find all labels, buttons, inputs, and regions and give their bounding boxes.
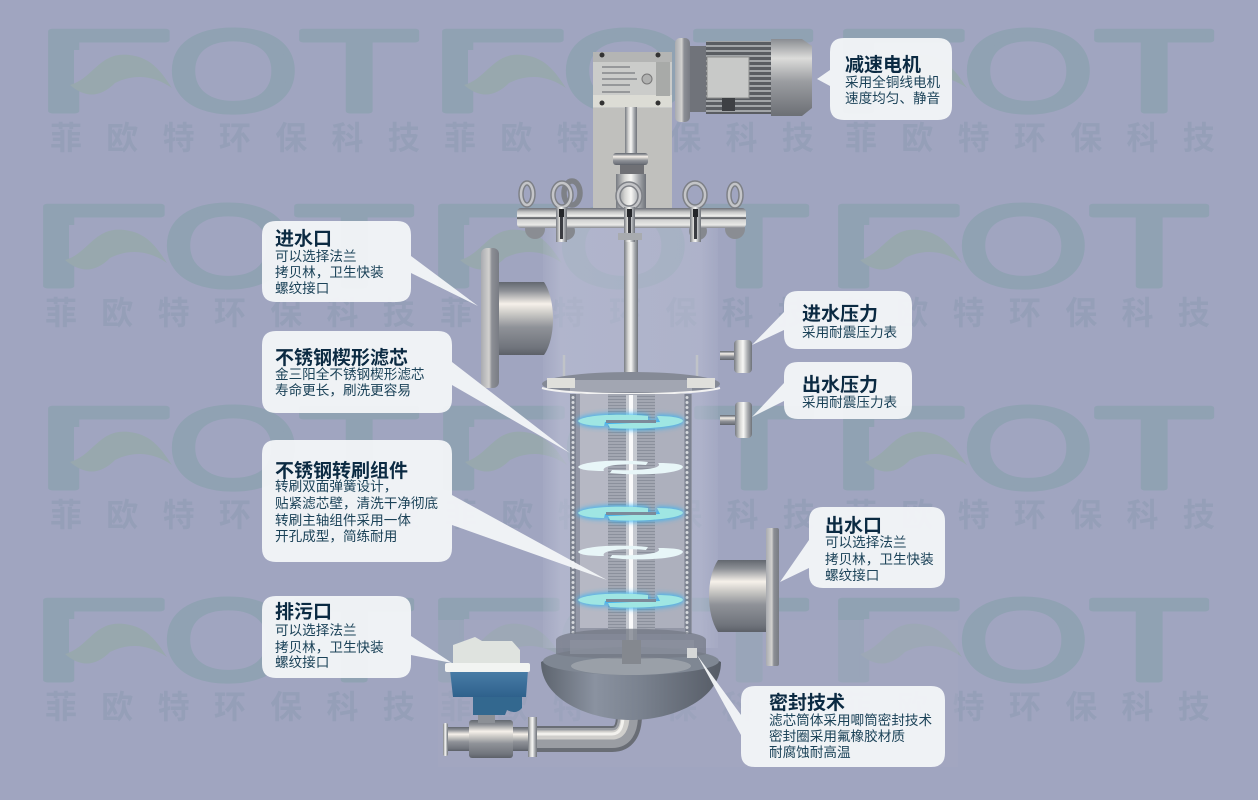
callout: 进水口: 可以选择法兰 xyxy=(275,249,357,264)
lower machine backdrop xyxy=(438,620,958,767)
watermark logo row 2 left: F xyxy=(29,182,169,311)
callout: 不锈钢楔形滤芯: 金三阳全不锈钢楔形滤芯 xyxy=(275,366,425,382)
watermark logo row 3 right: 菲欧特环保科技 xyxy=(845,497,1239,533)
watermark logo row 4 centre xyxy=(424,575,834,725)
callout: 出水口: 可以选择法兰 xyxy=(825,535,907,550)
watermark logo row 4 left: O xyxy=(162,575,294,705)
watermark logo row 4 right: F xyxy=(824,576,964,705)
callout: 出水口 xyxy=(780,507,945,588)
watermark logo row 2 centre: O xyxy=(558,181,689,311)
brush ring 4 xyxy=(578,546,683,559)
callout: 排污口: 排污口 xyxy=(275,601,332,623)
callout: 不锈钢转刷组件: 转刷双面弹簧设计， xyxy=(275,479,397,494)
icon: gearbox xyxy=(593,52,672,108)
watermark logo row 4 left xyxy=(29,575,439,725)
watermark logo row 4 centre: F xyxy=(424,576,564,705)
watermark logo row 2 centre: F xyxy=(424,182,564,311)
filter machine xyxy=(443,38,812,758)
callout: 密封技术: 耐腐蚀耐高温 xyxy=(769,744,851,760)
watermark logo row 1 centre xyxy=(428,6,838,156)
callout: 密封技术: 密封圈采用氟橡胶材质 xyxy=(769,728,905,744)
watermark logo row 1 left: T xyxy=(299,7,419,136)
watermark logo row 4 right: O xyxy=(958,575,1089,705)
callout: 进水口: 进水口 xyxy=(275,228,332,250)
icon: drain pipe xyxy=(530,715,629,739)
callout: 不锈钢楔形滤芯: 不锈钢楔形滤芯 xyxy=(275,347,408,369)
callout: 进水压力: 进水压力 xyxy=(802,303,878,325)
callout: 出水口: 拷贝林，卫生快装 xyxy=(825,552,934,567)
brush ring 1 xyxy=(578,415,683,429)
callout: 密封技术: 密封技术 xyxy=(769,691,845,714)
watermark logo row 2 right: 菲欧特环保科技 xyxy=(840,295,1234,331)
watermark logo row 3 left: F xyxy=(34,384,174,513)
watermark logo row 3 centre xyxy=(429,383,839,533)
watermark logo row 2 left: 菲欧特环保科技 xyxy=(45,295,439,331)
watermark logo row 4 left: F xyxy=(29,576,169,705)
icon: top clamp plate xyxy=(517,207,746,242)
watermark logo row 2 right: T xyxy=(1089,182,1209,311)
icon: support bracket xyxy=(593,105,672,211)
watermark logo row 3 right: F xyxy=(829,384,969,513)
watermark logo row 2 left xyxy=(29,181,439,331)
callout: 进水压力: 采用耐震压力表 xyxy=(802,325,898,340)
watermark logo row 3 right: O xyxy=(962,383,1094,513)
watermark logo row 1 right: 菲欧特环保科技 xyxy=(845,120,1239,156)
shaft highlight xyxy=(629,395,633,640)
callout: 排污口: 可以选择法兰 xyxy=(275,623,357,638)
callout: 出水口: 出水口 xyxy=(825,515,882,537)
callout: 进水压力 xyxy=(752,291,912,349)
watermark logo row 2 right: F xyxy=(824,182,964,311)
callout: 出水压力 xyxy=(752,362,912,419)
icon: inner flange xyxy=(542,355,720,396)
watermark logo row 3 left xyxy=(34,383,444,533)
watermark logo row 3 centre: 菲欧特环保科技 xyxy=(445,497,839,533)
watermark logo row 1 centre: F xyxy=(428,7,568,136)
callout: 密封技术 xyxy=(697,655,945,767)
callout: 排污口: 拷贝林，卫生快装 xyxy=(275,640,384,655)
callout: 不锈钢转刷组件: 不锈钢转刷组件 xyxy=(275,460,408,482)
watermark logo row 4 right xyxy=(824,575,1234,725)
main shaft xyxy=(624,238,638,398)
watermark logo row 1 centre: O xyxy=(562,6,693,136)
brush ring 2 xyxy=(578,461,683,474)
watermark logo row 1 right xyxy=(829,6,1239,156)
callout: 排污口 xyxy=(262,596,452,678)
watermark logo row 4 right: 菲欧特环保科技 xyxy=(840,689,1234,725)
icon: eye bolts xyxy=(521,181,741,208)
icon: outlet pipe xyxy=(709,528,779,666)
icon: fan cover xyxy=(771,39,812,116)
callout: 密封技术: 滤芯筒体采用唧筒密封技术 xyxy=(769,712,933,728)
callout: 排污口: 螺纹接口 xyxy=(275,654,329,670)
watermark logo row 3 left: T xyxy=(299,384,419,513)
icon: seal collar xyxy=(556,629,706,664)
watermark logo row 4 left: T xyxy=(294,576,414,705)
watermark logo row 2 right: O xyxy=(958,181,1089,311)
callout: 不锈钢转刷组件: 开孔成型，简练耐用 xyxy=(275,528,397,544)
callout: 减速电机: 速度均匀、静音 xyxy=(845,90,940,106)
outer transparent tank xyxy=(543,228,718,648)
icon: drain valve xyxy=(443,637,537,758)
icon: inlet pressure gauge xyxy=(720,340,752,373)
watermark logo row 1 right: F xyxy=(829,7,969,136)
callout: 不锈钢楔形滤芯 xyxy=(262,331,570,453)
watermark logo row 3 centre: F xyxy=(429,384,569,513)
callout: 不锈钢转刷组件: 转刷主轴组件采用一体 xyxy=(275,513,411,528)
brush ring 3 xyxy=(578,507,683,521)
drive shaft upper xyxy=(625,107,637,157)
watermark logo row 1 centre: T xyxy=(693,7,813,136)
watermark logo row 1 left: F xyxy=(34,7,174,136)
watermark logo row 4 right: T xyxy=(1089,576,1209,705)
icon: motor flange xyxy=(675,38,690,122)
icon: glass cylinder xyxy=(570,394,692,634)
callout: 减速电机 xyxy=(817,38,952,120)
icon: bottom dish xyxy=(541,647,721,720)
watermark logo row 4 centre: 菲欧特环保科技 xyxy=(440,689,834,725)
watermark logo row 3 centre: O xyxy=(562,383,694,513)
callout: 不锈钢转刷组件: 贴紧滤芯壁，清洗干净彻底 xyxy=(275,496,439,511)
watermark logo row 2 left: O xyxy=(162,181,294,311)
watermark logo row 3 right: T xyxy=(1094,384,1214,513)
watermark logo row 2 centre xyxy=(424,181,834,331)
callout: 进水口 xyxy=(262,221,478,306)
callout: 不锈钢转刷组件 xyxy=(262,440,607,580)
callout: 出水压力: 采用耐震压力表 xyxy=(802,395,898,410)
watermark logo row 2 centre: T xyxy=(689,182,809,311)
watermark logo row 1 left xyxy=(34,6,444,156)
icon: nut and collar xyxy=(613,153,648,210)
callout: 进水口: 拷贝林，卫生快装 xyxy=(275,265,384,280)
icon: outlet pressure gauge xyxy=(720,402,752,438)
watermark logo row 2 left: T xyxy=(294,182,414,311)
icon: motor finned body xyxy=(706,41,772,114)
watermark logo row 3 centre: T xyxy=(694,384,814,513)
watermark logo row 2 centre: 菲欧特环保科技 xyxy=(440,295,834,331)
brush ring 5 xyxy=(578,594,683,608)
watermark logo row 1 left: O xyxy=(168,6,299,136)
watermark logo row 1 right: T xyxy=(1094,7,1214,136)
watermark logo row 1 centre: 菲欧特环保科技 xyxy=(444,120,838,156)
callout: 进水口: 螺纹接口 xyxy=(275,280,329,296)
icon: motor adaptor xyxy=(690,46,707,112)
icon: inlet pipe xyxy=(481,248,553,388)
callout: 减速电机: 采用全铜线电机 xyxy=(845,74,941,90)
watermark logo row 2 right xyxy=(824,181,1234,331)
watermark logo row 3 left: O xyxy=(168,383,299,513)
watermark logo row 1 left: 菲欧特环保科技 xyxy=(50,120,444,156)
callout: 出水压力: 出水压力 xyxy=(802,374,878,396)
watermark logo row 1 right: O xyxy=(962,6,1094,136)
watermark logo row 4 left: 菲欧特环保科技 xyxy=(45,689,439,725)
icon: terminal box xyxy=(707,57,749,98)
watermark logo row 4 centre: O xyxy=(558,575,689,705)
callout: 出水口: 螺纹接口 xyxy=(825,567,879,583)
main shaft inner xyxy=(626,395,637,640)
watermark logo row 3 left: 菲欧特环保科技 xyxy=(50,497,444,533)
callout: 不锈钢楔形滤芯: 寿命更长，刷洗更容易 xyxy=(275,382,411,398)
watermark logo row 3 right xyxy=(829,383,1239,533)
watermark logo row 4 centre: T xyxy=(689,576,809,705)
callout: 减速电机: 减速电机 xyxy=(845,54,921,76)
